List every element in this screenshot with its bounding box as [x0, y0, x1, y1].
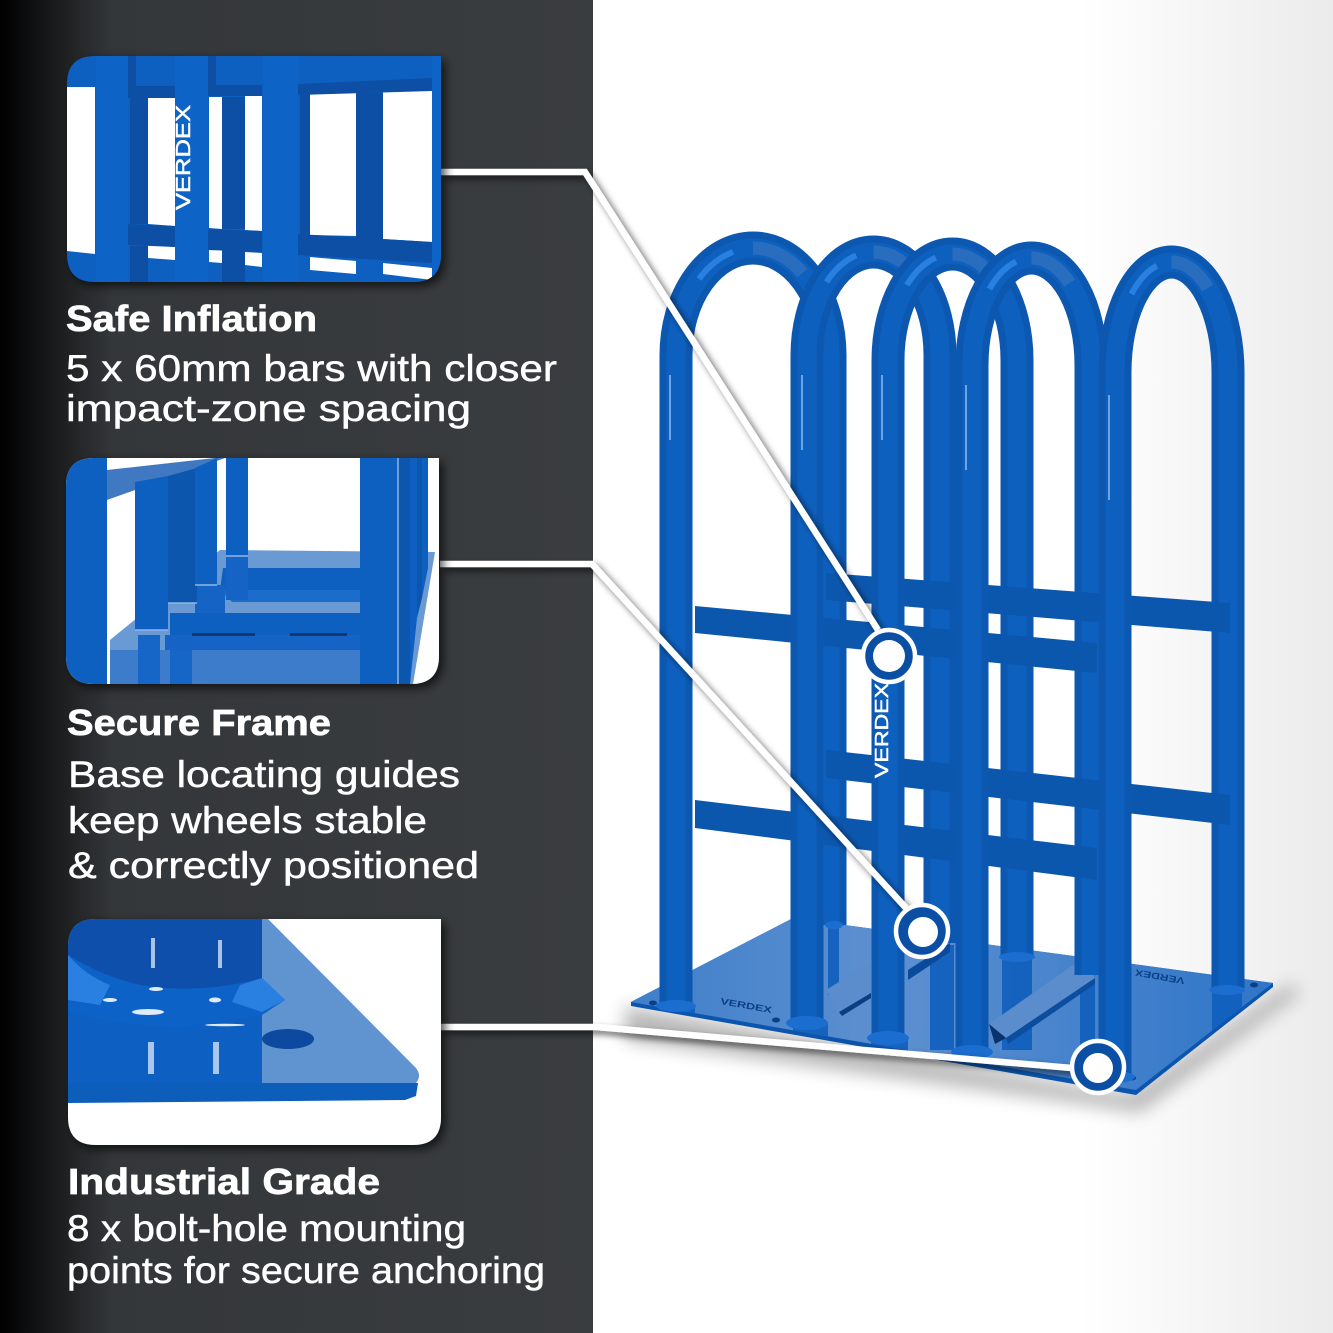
arch 4 [972, 258, 1091, 1053]
cross bars [695, 573, 1230, 880]
background [593, 0, 1333, 1333]
description: 5 x 60mm bars with closer [66, 348, 557, 389]
marker: industrial grade [1072, 1041, 1124, 1093]
logo on close-up: VERDEX [173, 105, 195, 210]
description: Base locating guides [68, 754, 460, 795]
description [68, 754, 479, 886]
connector: secure frame [440, 564, 906, 908]
description: impact-zone spacing [66, 388, 471, 429]
arch 5 [1115, 262, 1228, 1077]
photo: cage bars close-up [60, 50, 450, 290]
left dark panel [0, 0, 593, 1333]
description: 8 x bolt-hole mounting [67, 1208, 466, 1249]
photo: base plate corner close-up [60, 910, 450, 1150]
description: points for secure anchoring [67, 1250, 545, 1291]
panel: industrial grade [60, 910, 545, 1291]
arch 1 [676, 248, 830, 1005]
wheel locating guides [826, 943, 1095, 1044]
arch 2 [807, 252, 940, 1023]
floor shadow [625, 985, 1300, 1112]
panel: safe inflation [60, 50, 557, 429]
front legs [656, 375, 1245, 1083]
marker: safe inflation [863, 630, 915, 682]
arch 3 [888, 254, 1017, 1038]
product: blue tyre inflation cage [625, 248, 1300, 1112]
base plate: VERDEX [1134, 967, 1185, 986]
connector: industrial grade [441, 1027, 1072, 1068]
description [66, 348, 557, 429]
heading: Industrial Grade [68, 1161, 380, 1202]
VERDEX logo on bar: VERDEX [872, 683, 892, 778]
marker: secure frame [896, 905, 948, 957]
base plate: VERDEX [720, 996, 773, 1015]
heading: Safe Inflation [66, 298, 317, 339]
base plate [631, 918, 1273, 1095]
description: & correctly positioned [68, 845, 479, 886]
panel: secure frame [60, 450, 479, 886]
heading: Secure Frame [67, 702, 331, 743]
connector: safe inflation [441, 172, 878, 630]
description: keep wheels stable [68, 800, 427, 841]
description [67, 1208, 545, 1291]
connector lines and markers [440, 172, 1124, 1093]
photo: base guides close-up [60, 450, 450, 690]
